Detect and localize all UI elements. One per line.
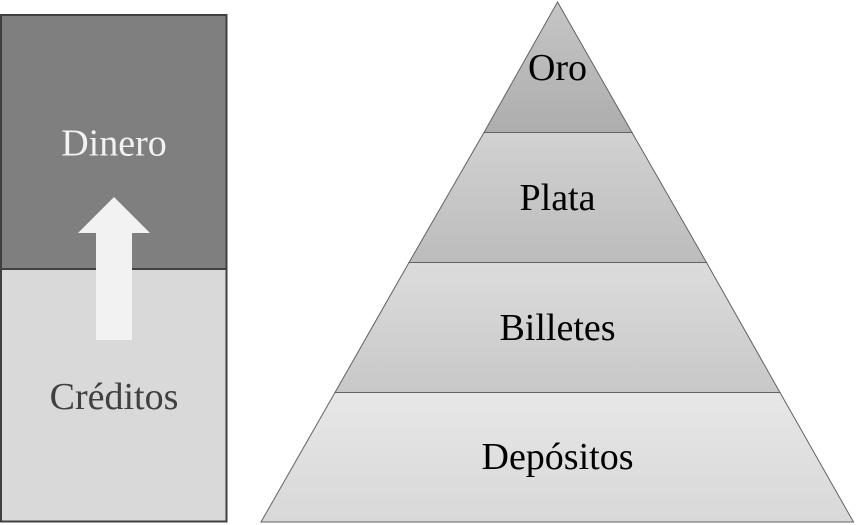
panel: dinero y créditos bbox=[1, 15, 226, 522]
block: Créditos bbox=[1, 269, 226, 522]
block: Dinero bbox=[1, 15, 226, 269]
tier: Depósitos: Depósitos bbox=[482, 436, 634, 478]
block: Dinero: Dinero bbox=[61, 122, 167, 164]
tier: Plata: Plata bbox=[520, 177, 596, 219]
chart: pirámide de activos bbox=[261, 2, 854, 522]
arrow: créditos to dinero bbox=[78, 197, 150, 340]
tier: Plata bbox=[409, 132, 706, 262]
tier: Billetes bbox=[335, 262, 780, 392]
tier: Oro bbox=[484, 2, 632, 132]
block: Créditos: Créditos bbox=[50, 376, 178, 418]
tier: Oro: Oro bbox=[528, 47, 587, 89]
tier: Depósitos bbox=[261, 392, 854, 522]
tier: Billetes: Billetes bbox=[499, 307, 616, 349]
